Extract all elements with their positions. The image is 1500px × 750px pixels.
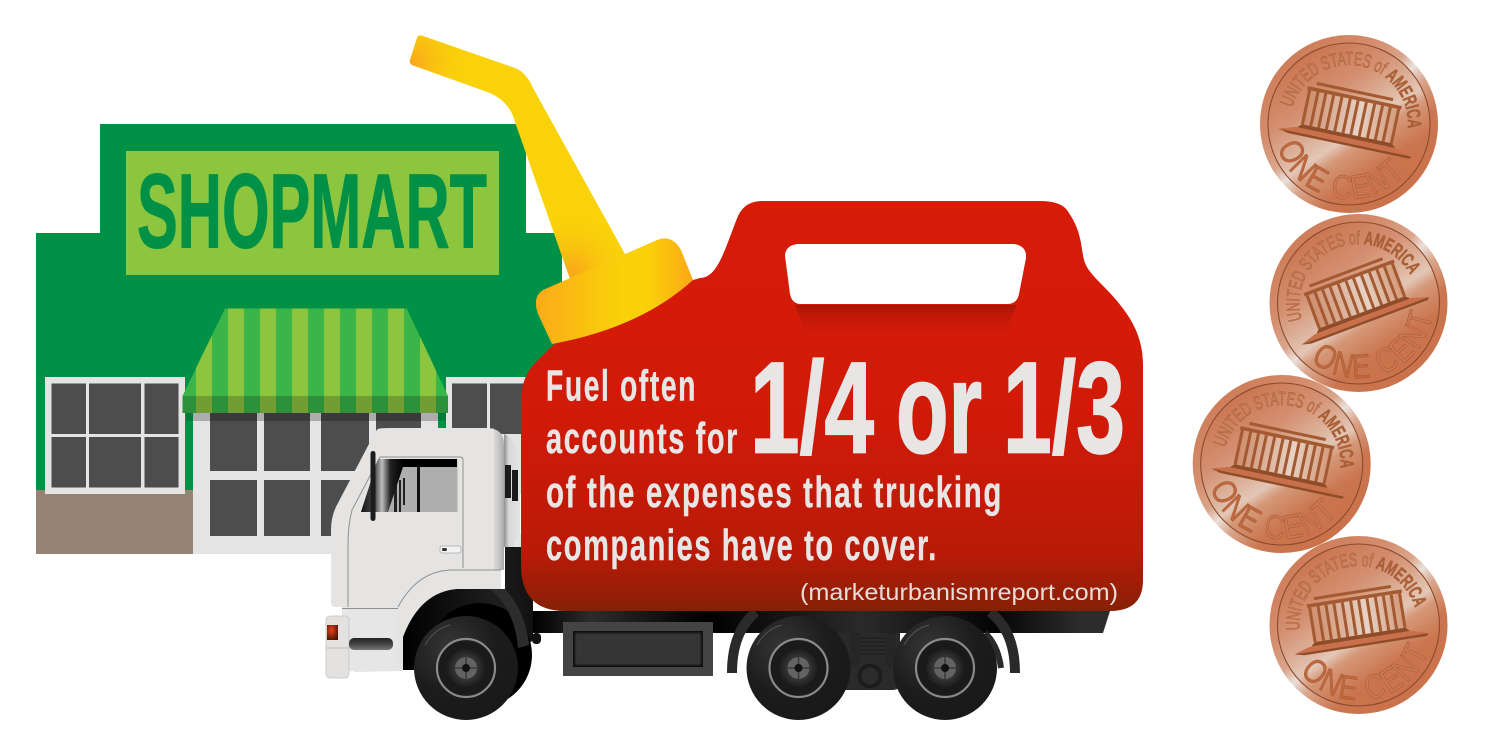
penny 1: UNITED STATES of AMERICA xyxy=(1280,52,1422,128)
big figure: 1/4 or 1/3: or xyxy=(896,334,982,480)
front mud flap xyxy=(490,589,529,648)
penny 3 xyxy=(1192,375,1371,553)
penny 1: ONE CENT xyxy=(1280,141,1400,200)
sign board xyxy=(126,151,499,275)
nozzle spout xyxy=(410,35,625,279)
text: accounts for: accounts for xyxy=(546,414,739,463)
text: of the expenses: of the expenses that trucking xyxy=(546,468,1003,517)
right window xyxy=(446,377,536,494)
striped awning xyxy=(180,308,450,414)
rear wheel one xyxy=(746,616,850,720)
big figure: 1/4 or 1/3: 1/3 xyxy=(1003,334,1125,480)
cab rear edge shading xyxy=(486,428,504,570)
handle shadow xyxy=(795,305,1017,338)
sign text: SHOPMART xyxy=(137,152,487,270)
nozzle cap xyxy=(536,238,693,344)
store entrance xyxy=(186,413,446,554)
penny 4: ONE CENT xyxy=(1304,641,1426,700)
rear wheel shadow xyxy=(428,603,532,707)
big figure: 1/4 or 1/3 xyxy=(750,334,1125,480)
penny 4: UNITED STATES of AMERICA xyxy=(1286,552,1426,630)
penny 2 xyxy=(1270,214,1448,392)
store building xyxy=(36,124,562,554)
rear cab panel xyxy=(504,434,521,547)
big figure: 1/4 or 1/3: 1/4 xyxy=(750,334,874,480)
truck xyxy=(326,428,1110,720)
mud flap bolt xyxy=(532,633,541,644)
front black wheel arch xyxy=(402,547,533,671)
can body xyxy=(521,201,1143,611)
tail lamp xyxy=(327,625,338,640)
source: (marketurbanismreport.com) xyxy=(800,579,1118,605)
text: companies: companies have to cover. xyxy=(546,521,938,570)
cab body xyxy=(331,428,504,672)
penny 3: ONE CENT xyxy=(1212,481,1334,540)
rear fenders xyxy=(732,612,1015,673)
store green facade xyxy=(36,124,562,490)
door outline xyxy=(342,457,501,608)
penny 4 xyxy=(1270,536,1448,714)
store brown base wall xyxy=(36,490,193,554)
cab window xyxy=(361,459,458,512)
bumper xyxy=(326,616,393,678)
lower cab step xyxy=(342,607,398,672)
chassis beam xyxy=(533,611,1110,633)
text: fuel often: Fuel often xyxy=(546,362,697,410)
left window xyxy=(45,377,185,494)
bumper pipe xyxy=(349,638,393,650)
penny 3: UNITED STATES of AMERICA xyxy=(1212,392,1354,468)
door handle xyxy=(440,546,461,553)
side mirror xyxy=(370,451,376,521)
penny 2: UNITED STATES of AMERICA xyxy=(1286,230,1420,322)
fuel can xyxy=(410,35,1143,611)
side tool box xyxy=(563,622,713,676)
front wheel xyxy=(414,616,518,720)
rear wheel two xyxy=(893,616,997,720)
penny 1 xyxy=(1260,35,1438,213)
rear axle housing xyxy=(820,620,900,690)
penny 2: ONE CENT xyxy=(1314,309,1432,378)
